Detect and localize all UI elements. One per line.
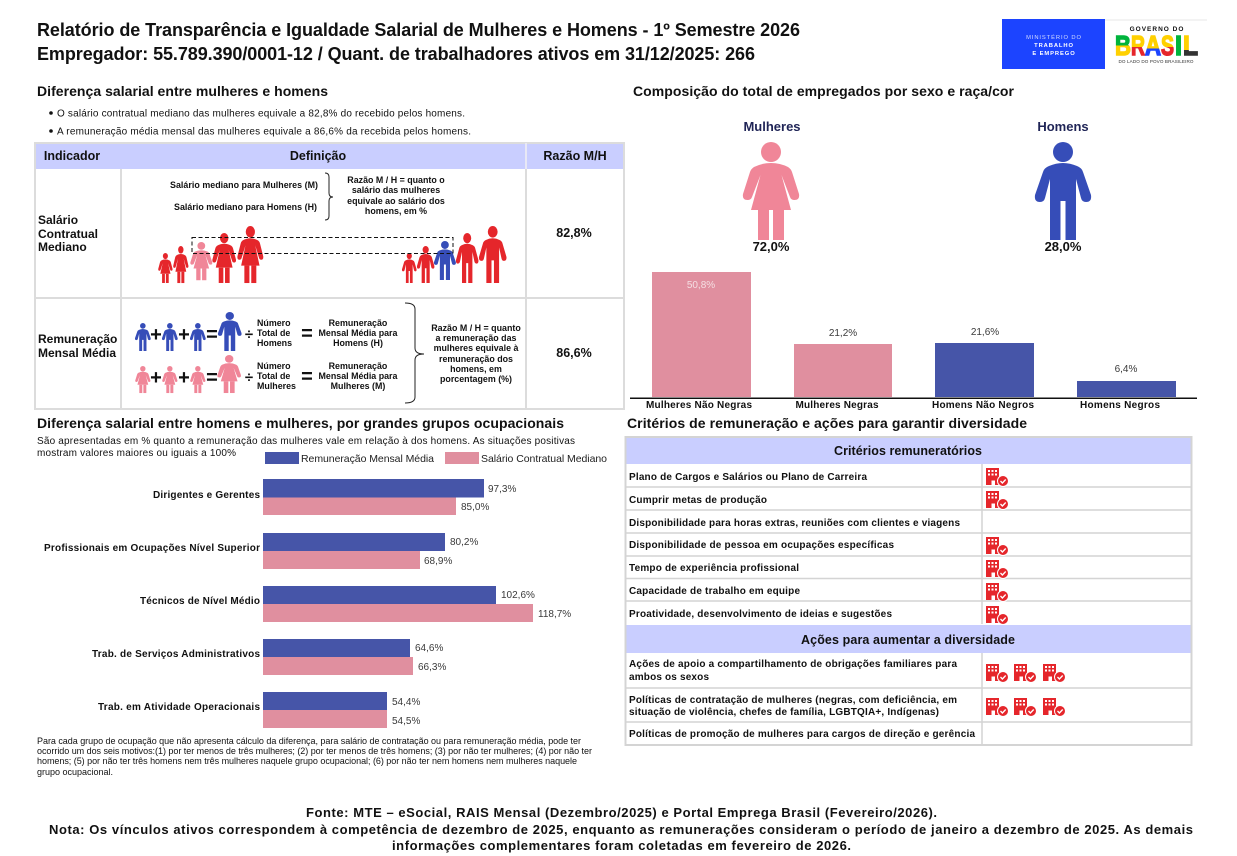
description text: mostram valores maiores ou iguais a 100% (37, 448, 236, 459)
action rows (629, 659, 975, 740)
chart legend: Salário Contratual Mediano (481, 453, 607, 465)
logo: governo do brasil: R (1131, 30, 1145, 61)
group: técnicos de nível médio: 102,6% (501, 590, 535, 601)
brace and ratio definition: Razão M / H = quanto (431, 323, 521, 333)
description text: São apresentadas em % quanto a remuneração das mulheres vale em relação à dos homens. As situações positivas (37, 436, 575, 447)
pictogram: mulheres 72,0%: Mulheres (743, 119, 801, 134)
pictogram: homens ordenados por salário (402, 226, 507, 283)
heading: composição: Composição do total de empregados por sexo e raça/cor (633, 83, 1015, 99)
footnote: Para cada grupo de ocupação que não apresenta cálculo da diferença, para salário de contratação ou para remuneração média, pode ter (37, 736, 581, 746)
equation: mulheres: = (301, 366, 313, 388)
equation: homens: Total de (257, 328, 290, 338)
header: ações para aumentar a diversidade: Ações para aumentar a diversidade (801, 633, 1015, 647)
equation: homens: = (206, 324, 218, 346)
equation: homens: + (150, 324, 162, 346)
criteria rows (629, 472, 960, 620)
criteria rows: Cumprir metas de produção (629, 495, 767, 506)
group: técnicos de nível médio: Técnicos de Nível Médio (140, 596, 260, 607)
equation: mulheres: Mulheres (257, 381, 296, 391)
group: serviços administrativos: 64,6% (415, 643, 443, 654)
equation: homens: Homens (257, 338, 292, 348)
title: Relatório de Transparência e Igualdade Salarial de Mulheres e Homens - 1º Semestre 2026 (37, 20, 800, 40)
heading: diferença salarial: Diferença salarial entre mulheres e homens (37, 83, 328, 99)
panel: critérios e ações (626, 437, 1192, 745)
group: dirigentes e gerentes (153, 479, 516, 515)
table header (44, 149, 607, 163)
group: técnicos de nível médio: 118,7% (538, 609, 571, 620)
pictogram: mulheres 72,0%: 72,0% (753, 239, 790, 254)
pictogram: homens 28,0% (1035, 119, 1091, 254)
equation: homens: = (301, 323, 313, 345)
chart legend: Remuneração Mensal Média (301, 453, 434, 465)
description text (37, 436, 575, 459)
equation: mulheres: Mulheres (M) (331, 381, 385, 391)
logo: governo do brasil: L (1183, 30, 1198, 61)
panel: tabela de indicadores (35, 143, 624, 409)
pictogram: homens 28,0%: Homens (1037, 119, 1089, 134)
logo: governo do brasil: B (1115, 30, 1131, 61)
equation: mulheres: Remuneração (329, 361, 388, 371)
criteria rows: Disponibilidade de pessoa em ocupações específicas (629, 540, 894, 551)
footnote: grupo ocupacional. (37, 767, 113, 777)
definition: salário mediano (170, 173, 445, 220)
table header: Razão M/H (543, 149, 607, 163)
bar chart: composição por sexo e raça/cor: 6,4% (1115, 364, 1138, 375)
brace and ratio definition: porcentagem (%) (440, 374, 512, 384)
pictogram: mulheres ordenadas por salário (158, 226, 263, 283)
brace and ratio definition (405, 303, 521, 403)
equation: mulheres: + (178, 367, 190, 389)
definition: salário mediano: homens, em % (365, 206, 427, 216)
title (37, 20, 800, 64)
row label: remuneração mensal média: Mensal Média (38, 346, 116, 360)
heading: critérios: Critérios de remuneração e ações para garantir diversidade (627, 415, 1027, 431)
logo: governo do brasil: GOVERNO DO (1130, 26, 1184, 33)
heading: grupos ocupacionais: Diferença salarial entre homens e mulheres, por grandes grupos ocupacionais (37, 415, 564, 431)
footer: fonte e nota: informações complementares foram coletadas em fevereiro de 2026. (392, 838, 851, 853)
footnote: ocorrido um dos seis motivos:(1) por ter menos de três mulheres; (2) por ter menos de três homens; (3) por não ter mulheres; (4) por não ter (37, 746, 592, 756)
equation: homens: Mensal Média para (319, 328, 398, 338)
brace and ratio definition: homens, em (450, 364, 502, 374)
footnote: homens; (5) por não ter três homens nem três mulheres naquele grupo ocupacional; (6) por não ter nem homens nem mulheres naquele (37, 756, 577, 766)
row label: salário contratual mediano: Contratual (38, 227, 98, 241)
table header: Indicador (44, 149, 100, 163)
pictogram: mulheres 72,0% (743, 119, 801, 254)
bar chart: composição por sexo e raça/cor: 21,6% (971, 327, 999, 338)
footer: fonte e nota: Fonte: MTE – eSocial, RAIS Mensal (Dezembro/2025) e Portal Emprega Brasil (Fevereiro/2026). (306, 805, 937, 820)
value: 86,6%: 86,6% (556, 346, 592, 360)
pictogram: homens 28,0%: 28,0% (1045, 239, 1082, 254)
definition: salário mediano: Razão M / H = quanto o (347, 175, 445, 185)
action rows: situação de violência, chefes de família, LGBTQIA+, Indígenas) (629, 707, 939, 718)
bullet list (49, 108, 471, 138)
group: serviços administrativos: 66,3% (418, 662, 446, 673)
icons: ações adotadas (986, 664, 1066, 716)
action rows: Políticas de contratação de mulheres (negras, com deficiência, em (629, 695, 957, 706)
group: atividade operacionais (98, 692, 420, 728)
bullet list: O salário contratual mediano das mulheres equivale a 82,8% do recebido pelos homens. (57, 108, 465, 120)
chart legend (265, 452, 607, 465)
action rows: ambos os sexos (629, 672, 709, 683)
brace and ratio definition: a remuneração das (436, 333, 517, 343)
footer: fonte e nota (49, 805, 1193, 853)
logo: governo do brasil: I (1175, 30, 1182, 61)
equation: homens (135, 312, 398, 351)
brace and ratio definition: mulheres equivale à (434, 343, 518, 353)
criteria rows: Capacidade de trabalho em equipe (629, 586, 800, 597)
logo: ministério do trabalho e emprego (1002, 19, 1105, 69)
equation: homens: Remuneração (329, 318, 388, 328)
equation: mulheres (135, 355, 398, 393)
bar chart: grupos ocupacionais (44, 479, 571, 728)
equation: mulheres: ÷ (245, 369, 253, 386)
definition: salário mediano: salário das mulheres (352, 185, 440, 195)
bar chart: composição por sexo e raça/cor: 50,8% (687, 280, 715, 291)
equation: homens: Homens (H) (333, 338, 383, 348)
equation: homens: Número (257, 318, 291, 328)
group: profissionais nível superior: 68,9% (424, 556, 452, 567)
group: profissionais nível superior: 80,2% (450, 537, 478, 548)
row label: salário contratual mediano: Mediano (38, 240, 87, 254)
criteria rows: Disponibilidade para horas extras, reuniões com clientes e viagens (629, 518, 960, 529)
equation: homens: ÷ (245, 326, 253, 343)
logo: governo do brasil: DO LADO DO POVO BRASILEIRO (1118, 59, 1194, 64)
bar chart: composição por sexo e raça/cor: Mulheres Não Negras (646, 400, 752, 411)
logo: governo do brasil: S (1161, 30, 1174, 61)
bar chart: composição por sexo e raça/cor: Homens Não Negros (932, 400, 1034, 411)
logo: ministério do trabalho e emprego: MINISTÉRIO DO (1026, 34, 1082, 41)
row label: remuneração mensal média: Remuneração (38, 332, 117, 346)
group: dirigentes e gerentes: 97,3% (488, 484, 516, 495)
definition: salário mediano: Salário mediano para Mulheres (M) (170, 180, 318, 190)
equation: mulheres: Número (257, 361, 291, 371)
group: profissionais nível superior: Profissionais em Ocupações Nível Superior (44, 543, 260, 554)
group: atividade operacionais: Trab. em Atividade Operacionais (98, 702, 260, 713)
footer: fonte e nota: Nota: Os vínculos ativos correspondem à competência de dezembro de 2025, enquanto as remunerações consideram o período de janeiro a dezembro de 2025. As demais (49, 822, 1193, 837)
equation: homens: + (178, 324, 190, 346)
group: serviços administrativos (92, 639, 446, 675)
logo: ministério do trabalho e emprego: E EMPREGO (1032, 51, 1076, 57)
bar chart: composição por sexo e raça/cor: Mulheres Negras (796, 400, 879, 411)
logo: governo do brasil (1105, 19, 1207, 64)
header: critérios remuneratórios: Critérios remuneratórios (834, 444, 982, 458)
action rows: Políticas de promoção de mulheres para cargos de direção e gerência (629, 729, 975, 740)
table header: Definição (290, 149, 346, 163)
group: dirigentes e gerentes: Dirigentes e Gerentes (153, 490, 260, 501)
action rows: Ações de apoio a compartilhamento de obrigações familiares para (629, 659, 957, 670)
header: critérios remuneratórios (626, 438, 1190, 464)
equation: mulheres: = (206, 367, 218, 389)
criteria rows: Tempo de experiência profissional (629, 563, 799, 574)
bullet list: A remuneração média mensal das mulheres equivale a 86,6% da recebida pelos homens. (57, 126, 471, 138)
group: serviços administrativos: Trab. de Serviços Administrativos (92, 649, 260, 660)
footnote (37, 736, 592, 777)
definition: salário mediano: Salário mediano para Homens (H) (174, 202, 317, 212)
criteria rows: Plano de Cargos e Salários ou Plano de Carreira (629, 472, 867, 483)
group: profissionais nível superior (44, 533, 478, 569)
logo: ministério do trabalho e emprego: TRABALHO (1034, 43, 1074, 49)
bar chart: composição por sexo e raça/cor: Homens Negros (1080, 400, 1160, 411)
group: técnicos de nível médio (140, 586, 571, 622)
brace and ratio definition: remuneração dos (439, 354, 513, 364)
definition: salário mediano: equivale ao salário dos (347, 196, 445, 206)
logo: governo do brasil: A (1145, 30, 1161, 61)
header: ações para aumentar a diversidade (626, 625, 1190, 653)
group: dirigentes e gerentes: 85,0% (461, 502, 489, 513)
equation: mulheres: Mensal Média para (319, 371, 398, 381)
group: atividade operacionais: 54,5% (392, 716, 420, 727)
icons: critérios adotados (986, 468, 1008, 624)
criteria rows: Proatividade, desenvolvimento de ideias e sugestões (629, 609, 892, 620)
bar chart: composição por sexo e raça/cor: 21,2% (829, 328, 857, 339)
equation: mulheres: + (150, 367, 162, 389)
equation: mulheres: Total de (257, 371, 290, 381)
title: Empregador: 55.789.390/0001-12 / Quant. de trabalhadores ativos em 31/12/2025: 266 (37, 44, 755, 64)
bar chart: composição por sexo e raça/cor (630, 272, 1197, 411)
group: atividade operacionais: 54,4% (392, 697, 420, 708)
row label: salário contratual mediano: Salário (38, 213, 78, 227)
value: 82,8%: 82,8% (556, 226, 592, 240)
